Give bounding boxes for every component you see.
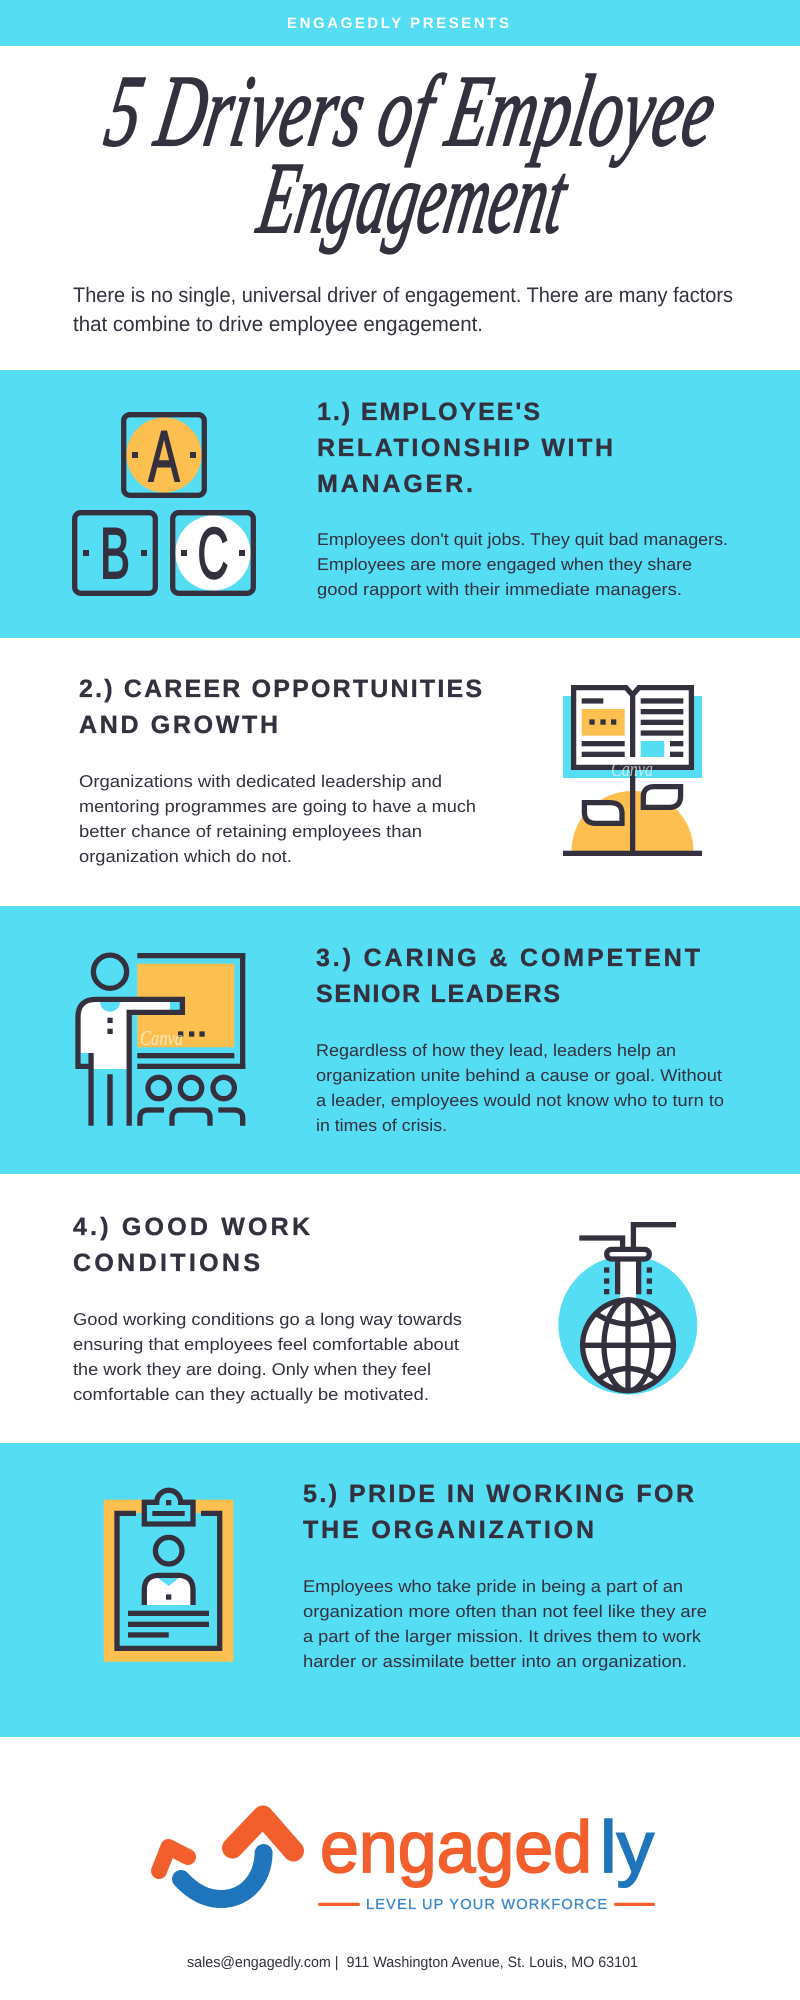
- top banner: ENGAGEDLY PRESENTS: [287, 15, 509, 32]
- body text: driver 3: a leader, employees would not know who to turn to: [316, 1091, 724, 1110]
- body text: driver 2: Organizations with dedicated leadership and: [79, 772, 442, 791]
- panel: driver 4: [73, 1213, 697, 1404]
- body text: driver 2: organization which do not.: [79, 847, 292, 866]
- body text: driver 3: [316, 1041, 724, 1135]
- panel: driver 3: [0, 906, 800, 1174]
- icon: book plant: [563, 688, 702, 856]
- icon: ABC blocks: C: [198, 514, 228, 594]
- body text: driver 2: better chance of retaining employees than: [79, 822, 422, 841]
- body text: driver 4: comfortable can they actually be motivated.: [73, 1385, 429, 1404]
- heading: driver 1: RELATIONSHIP WITH: [317, 434, 613, 462]
- body text: driver 1: [317, 530, 728, 599]
- heading: driver 1: MANAGER.: [317, 470, 473, 498]
- icon: ABC blocks: A: [148, 417, 180, 497]
- panel: driver 2: [79, 675, 702, 866]
- heading: driver 1: [317, 398, 613, 498]
- body text: driver 5: [303, 1577, 707, 1671]
- body text: driver 5: organization more often than not feel like they are: [303, 1602, 707, 1621]
- heading: driver 1: 1.) EMPLOYEE'S: [317, 398, 540, 426]
- intro text: that combine to drive employee engagement.: [73, 313, 483, 336]
- body text: driver 2: [79, 772, 476, 866]
- heading: driver 2: [79, 675, 482, 739]
- heading: driver 3: SENIOR LEADERS: [316, 980, 560, 1008]
- body text: driver 4: [73, 1310, 462, 1404]
- heading: driver 4: 4.) GOOD WORK: [73, 1213, 310, 1241]
- logo wordmark: ly: [600, 1807, 655, 1888]
- body text: driver 4: ensuring that employees feel comfortable about: [73, 1335, 459, 1354]
- heading: driver 2: 2.) CAREER OPPORTUNITIES: [79, 675, 482, 703]
- title: Engagement: [250, 142, 576, 255]
- body text: driver 1: Employees are more engaged when they share: [317, 555, 692, 574]
- body text: driver 3: organization unite behind a cause or goal. Without: [316, 1066, 722, 1085]
- body text: driver 3: Regardless of how they lead, leaders help an: [316, 1041, 676, 1060]
- body text: driver 4: the work they are doing. Only when they feel: [73, 1360, 431, 1379]
- heading: driver 5: THE ORGANIZATION: [303, 1516, 594, 1544]
- icon: globe with pipes: [558, 1225, 697, 1394]
- body text: driver 5: Employees who take pride in being a part of an: [303, 1577, 683, 1596]
- body text: driver 2: mentoring programmes are going to have a much: [79, 797, 476, 816]
- heading: driver 3: [316, 944, 700, 1008]
- icon: book plant: Canva: [611, 757, 653, 781]
- heading: driver 4: CONDITIONS: [73, 1249, 260, 1277]
- icon: presenter at board: [78, 953, 245, 1126]
- heading: driver 5: 5.) PRIDE IN WORKING FOR: [303, 1480, 694, 1508]
- intro text: [73, 284, 733, 336]
- footer contact line: sales@engagedly.com | 911 Washington Avenue, St. Louis, MO 63101: [187, 1954, 638, 1971]
- icon: ABC blocks: [75, 415, 253, 594]
- intro text: There is no single, universal driver of engagement. There are many factors: [73, 284, 733, 307]
- icon: ABC blocks: B: [100, 514, 130, 594]
- logo wordmark: engaged: [320, 1807, 592, 1888]
- body text: driver 1: Employees don't quit jobs. They quit bad managers.: [317, 530, 728, 549]
- logo tagline: LEVEL UP YOUR WORKFORCE: [366, 1897, 607, 1913]
- panel: driver 5: [0, 1443, 800, 1737]
- top banner: [0, 0, 800, 46]
- body text: driver 1: good rapport with their immediate managers.: [317, 580, 682, 599]
- title: [98, 55, 724, 255]
- icon: logo arrows: [159, 1816, 294, 1899]
- panel: driver 1: [0, 370, 800, 638]
- body text: driver 4: Good working conditions go a long way towards: [73, 1310, 462, 1329]
- body text: driver 5: harder or assimilate better into an organization.: [303, 1652, 687, 1671]
- body text: driver 5: a part of the larger mission. It drives them to work: [303, 1627, 702, 1646]
- heading: driver 3: 3.) CARING & COMPETENT: [316, 944, 700, 972]
- heading: driver 5: [303, 1480, 694, 1544]
- icon: presenter at board: Canva: [140, 1026, 183, 1050]
- icon: clipboard profile: [104, 1490, 233, 1662]
- body text: driver 3: in times of crisis.: [316, 1116, 447, 1135]
- heading: driver 4: [73, 1213, 310, 1277]
- heading: driver 2: AND GROWTH: [79, 711, 278, 739]
- logo: engagedly: [159, 1807, 655, 1913]
